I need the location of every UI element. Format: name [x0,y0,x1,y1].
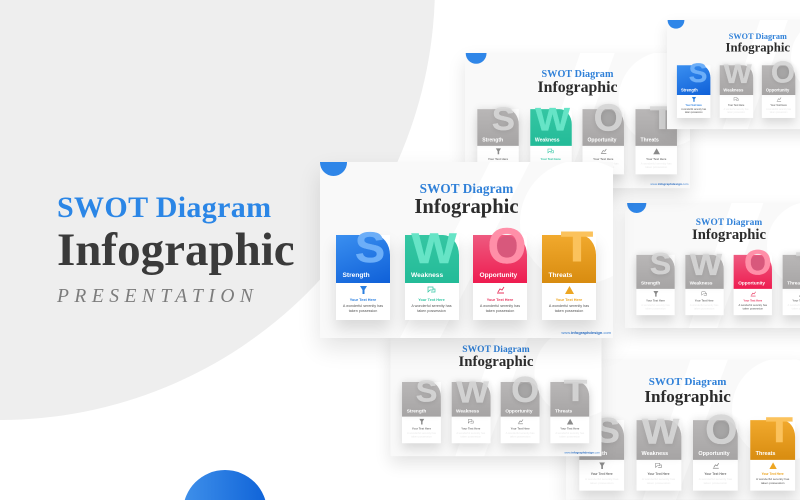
card: strength: Your Text Here [646,299,665,302]
card: opportunity: Your Text Here [593,157,613,160]
card: weakness [685,255,723,315]
card: weakness: Your Text Here [461,427,480,430]
card: weakness: W [456,374,488,409]
card: strength: Strength [407,408,426,413]
card: opportunity: taken possession [592,166,614,169]
card: strength: Strength [681,88,698,92]
panel: slide top right, strength highlighted: Infographic [726,41,790,55]
card: threats: T [650,99,675,136]
card: opportunity: O [511,370,539,410]
panel: slide middle right, opportunity highlighted [625,203,800,328]
card: strength: S [595,410,620,451]
card: threats: A wonderful serenity has [549,304,589,308]
card: threats: Threats [756,450,775,456]
panel: slide bottom centre, all grey: Infographic [458,354,533,370]
card: opportunity: Your Text Here [770,104,787,107]
card: strength: A wonderful serenity has [407,431,436,434]
card: strength: Your Text Here [591,472,613,476]
card: strength: S [416,374,437,409]
card: strength: A wonderful serenity has [483,162,513,165]
card: weakness: taken possession [461,435,481,438]
panel: main slide, all colours [320,162,613,338]
card: weakness [719,65,753,118]
card: threats: Threats [640,137,659,142]
card: weakness [530,109,571,174]
card: strength: Your Text Here [685,104,702,107]
card: strength: S [492,100,515,137]
card: threats: A wonderful serenity has [555,431,584,434]
card: weakness: A wonderful serenity has [690,303,718,306]
card: strength: taken possession [590,482,614,485]
card: strength [636,255,675,315]
panel: main slide, all colours: SWOT Diagram [420,181,513,196]
card: opportunity: A wonderful serenity has [699,477,732,480]
card: strength: Your Text Here [412,427,431,430]
card: threats: taken possession [560,435,580,438]
card: strength [402,382,441,443]
card: strength: taken possession [487,166,509,169]
card: weakness: Weakness [690,281,712,286]
card: opportunity: Opportunity [505,408,533,413]
panel: slide bottom centre, all grey [390,330,601,456]
card: strength: S [355,223,385,272]
card: threats: Your Text Here [646,157,666,160]
footer url: www.infographdesign.com [650,182,688,185]
card: threats [542,235,596,320]
card: threats: T [766,409,793,449]
card: threats: T [564,373,587,407]
panel: slide bottom centre, all grey: SWOT Diagram [462,343,530,354]
card: weakness: W [690,247,722,281]
card: strength: Strength [641,281,660,286]
panel: slide middle right, opportunity highlighted: SWOT Diagram [696,216,762,227]
heading: SWOT Diagram: SWOT Diagram [57,191,272,224]
card: threats: taken possession [761,482,784,485]
card: strength: Strength [482,137,503,142]
card: threats: Your Text Here [762,472,784,476]
card: weakness: Weakness [535,137,560,142]
card: weakness: Your Text Here [648,472,670,476]
card: opportunity: A wonderful serenity has [480,304,520,308]
card: opportunity: A wonderful serenity has [766,108,791,110]
card: weakness: W [723,58,751,88]
card: opportunity [693,420,738,491]
card: opportunity [473,235,527,320]
card: opportunity: Opportunity [587,137,616,142]
card: opportunity: taken possession [510,435,530,438]
card: weakness: Your Text Here [695,299,714,302]
card: strength: Your Text Here [350,298,376,302]
card: opportunity: O [744,243,772,283]
card: strength: taken possession [685,111,702,114]
card: strength: taken possession [349,309,377,313]
card: strength: A wonderful serenity has [641,303,670,306]
card: opportunity: A wonderful serenity has [588,162,619,165]
card: weakness: A wonderful serenity has [535,162,566,165]
card: opportunity: taken possession [770,111,787,114]
panel: slide top centre, weakness highlighted: SWOT Diagram [542,68,613,79]
panel: slide top centre, weakness highlighted [465,53,690,188]
card: threats: taken possession [555,309,583,313]
panel: slide bottom right, threats highlighted: Infographic [644,388,731,406]
card: threats [635,109,677,174]
card: opportunity: taken possession [486,309,514,313]
card: threats: A wonderful serenity has [641,162,672,165]
background grey circle [0,0,435,420]
panel: slide top centre, weakness highlighted: Infographic [538,79,617,96]
card: opportunity: taken possession [743,307,763,310]
card: weakness: Your Text Here [728,104,744,107]
card: opportunity: O [771,55,795,89]
card: threats: taken possession [645,166,667,169]
card: opportunity [583,109,624,174]
card: opportunity: Opportunity [738,281,765,286]
card: weakness [451,382,490,443]
panel: slide bottom right, threats highlighted [566,360,800,500]
card: opportunity: taken possession [704,482,727,485]
card: threats: Your Text Here [560,427,579,430]
card: weakness: taken possession [540,166,562,169]
card: opportunity [501,382,540,443]
card: strength: A wonderful serenity has [343,304,383,308]
card: opportunity: Your Text Here [704,472,726,476]
card: weakness: W [411,224,456,272]
card: weakness: A wonderful serenity has [642,477,675,480]
card: weakness: A wonderful serenity has [724,108,749,110]
card: strength [336,235,390,320]
card: threats: Threats [548,272,572,278]
card: threats: Your Text Here [556,298,582,302]
card: weakness: W [535,100,569,138]
panel: slide top right, strength highlighted [667,20,800,129]
card: opportunity: O [488,218,526,274]
card: weakness: A wonderful serenity has [456,431,485,434]
card: opportunity: O [594,96,624,139]
card: threats: T [561,222,593,270]
card: opportunity: Opportunity [480,272,517,278]
footer url: www.infographdesign.com [561,330,611,334]
panel: main slide, all colours: Infographic [414,196,519,218]
card: opportunity: Your Text Here [487,298,513,302]
card: strength [579,420,624,491]
panel: slide bottom right, threats highlighted: SWOT Diagram [649,375,726,388]
card: strength: Strength [585,450,607,456]
card: strength: Your Text Here [488,157,508,160]
card: strength: A wonderful serenity has [681,108,706,110]
card: weakness: Your Text Here [418,298,445,302]
card: weakness: Weakness [642,450,668,456]
card: weakness [636,420,681,491]
card: weakness: W [642,411,679,451]
card: weakness: Weakness [723,88,743,92]
card: opportunity: Your Text Here [743,299,762,302]
card: threats [750,420,795,491]
card: weakness: taken possession [694,307,714,310]
card: threats: Threats [555,408,572,413]
card: weakness: taken possession [417,309,446,313]
subheading: Presentation: PRESENTATION [57,286,258,307]
card: threats [550,382,589,443]
footer url: www.infographdesign.com [564,450,600,454]
card: weakness: Your Text Here [540,157,561,160]
card: weakness: A wonderful serenity has [411,304,452,308]
card: threats [783,255,800,315]
card: strength [477,109,519,174]
panel: slide top right, strength highlighted: SWOT Diagram [729,32,787,41]
card: strength: S [650,247,671,281]
panel: slide middle right, opportunity highlighted: Infographic [692,227,766,243]
card: opportunity: A wonderful serenity has [739,303,767,306]
card: strength: taken possession [645,307,666,310]
card: weakness: taken possession [647,482,670,485]
card: opportunity: Your Text Here [511,427,530,430]
blue circle at bottom [183,470,267,500]
heading: Infographic: Infographic [57,224,295,276]
card: opportunity: O [705,406,737,452]
card: strength: taken possession [411,435,432,438]
card: strength: Strength [342,272,370,278]
card: strength: A wonderful serenity has [585,477,618,480]
card: weakness: taken possession [727,111,745,114]
card: opportunity [762,65,795,118]
card: opportunity: A wonderful serenity has [506,431,535,434]
card: opportunity [734,255,772,315]
card: weakness: Weakness [456,408,479,413]
card: weakness: Weakness [411,272,443,278]
card: threats: A wonderful serenity has [756,477,789,480]
card: opportunity: Opportunity [698,450,730,456]
card: strength: S [689,58,707,88]
card: strength [677,65,710,118]
card: opportunity: Opportunity [766,88,789,92]
card: weakness [404,235,458,320]
